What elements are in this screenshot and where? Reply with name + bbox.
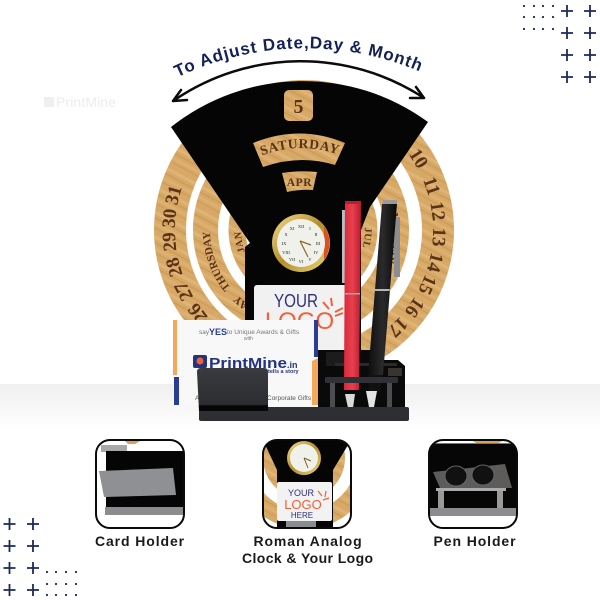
- business card: A: [195, 395, 200, 402]
- calendar wheel: day ring: MONDAY: [392, 212, 398, 264]
- analog clock: XI: [290, 226, 295, 231]
- label: roman analog clock and your logo: Clock & Your Logo: [242, 550, 374, 566]
- pen holder back plate: [318, 350, 405, 410]
- date tile: 5: [294, 96, 304, 118]
- analog clock: II: [314, 232, 318, 237]
- calendar wheel: month ring: JUL: [362, 228, 372, 248]
- calendar wheel: day ring: FRIDAY: [212, 150, 248, 191]
- red pen: [342, 201, 361, 408]
- decoration: bottom left plus and dot grid: [4, 518, 77, 596]
- analog clock: IV: [314, 250, 319, 255]
- black fan panel with stand: [171, 81, 428, 352]
- calendar wheel: day ring: [193, 174, 409, 320]
- business card: PrintMine: [209, 355, 287, 372]
- watermark logo: PrintMine: [56, 94, 116, 110]
- card holder front: [197, 368, 268, 411]
- day tile: SATURDAY: [260, 139, 340, 155]
- business card: [173, 320, 318, 406]
- label: card holder: Card Holder: [95, 533, 185, 549]
- calendar wheel: date ring: 29: [159, 231, 181, 252]
- decoration: top right plus and dot grid: [523, 5, 596, 83]
- thumbnail: clock and logo: LOGO: [284, 497, 322, 512]
- analog clock: X: [284, 232, 288, 237]
- your logo plate: LOGO: [265, 308, 334, 335]
- calendar wheel: date ring: 11: [418, 174, 444, 198]
- calendar wheel: date ring: 16: [400, 293, 428, 321]
- pen holder details: [326, 352, 402, 376]
- month tile: [282, 171, 317, 192]
- label: roman analog clock and your logo: [242, 533, 374, 566]
- calendar wheel: date ring: 15: [413, 272, 440, 298]
- business card: say: [199, 329, 210, 336]
- your logo plate: YOUR: [274, 291, 318, 311]
- analog clock: [272, 214, 330, 272]
- pen holder shelf and legs: [325, 377, 398, 409]
- your logo plate: [254, 285, 354, 350]
- calendar wheel: date ring: 27: [170, 277, 198, 304]
- business card: Corporate Gifts: [267, 395, 312, 402]
- calendar wheel: date ring: [159, 96, 449, 364]
- business card: YES: [209, 327, 227, 337]
- calendar wheel: day ring: AY: [232, 296, 245, 309]
- calendar wheel: date ring: 30: [159, 208, 181, 229]
- calendar wheel: date ring: 17: [383, 313, 412, 341]
- analog clock: VI: [299, 259, 304, 264]
- calendar wheel: date ring: 31: [161, 183, 187, 207]
- calendar wheel: date ring: 14: [422, 251, 447, 275]
- day tile: [253, 134, 345, 167]
- date tile: [284, 90, 313, 121]
- thumbnail: card holder: [96, 440, 184, 528]
- analog clock: IX: [282, 241, 287, 246]
- calendar wheel: date ring: 10: [404, 145, 432, 172]
- calendar wheel: month ring: JAN: [234, 232, 245, 252]
- floor shadow: [0, 384, 600, 430]
- thumbnail: clock and logo: HERE: [291, 511, 313, 520]
- calendar wheel: month ring: [228, 204, 378, 276]
- calendar wheel: day ring: SUNDAY: [323, 133, 369, 166]
- calendar wheel: date ring: 28: [162, 255, 187, 279]
- heading: curved title: To Adjust Date,Day & Month: [172, 36, 422, 76]
- base plate: [199, 407, 409, 421]
- thumbnail: pen holder: [429, 440, 517, 528]
- analog clock: VIII: [282, 250, 290, 255]
- black pen: [366, 200, 400, 407]
- analog clock: VII: [289, 257, 296, 262]
- business card: with: [244, 336, 253, 342]
- business card: to Unique Awards & Gifts: [227, 329, 300, 336]
- label: pen holder: Pen Holder: [434, 533, 516, 549]
- arrow: curved double-headed: [173, 61, 424, 101]
- month tile: APR: [287, 177, 312, 189]
- analog clock: V: [308, 257, 312, 262]
- business card: .in: [287, 360, 298, 370]
- analog clock: XII: [298, 224, 305, 229]
- calendar wheel: date ring: 13: [427, 227, 449, 247]
- calendar wheel: date ring: 26: [184, 299, 212, 327]
- analog clock: III: [316, 241, 321, 246]
- business card: tells a story: [268, 369, 300, 375]
- analog clock: I: [309, 226, 311, 231]
- calendar wheel: day ring: TUESDAY: [306, 301, 360, 330]
- thumbnail: clock and logo: YOUR: [288, 488, 314, 498]
- calendar wheel: date ring: 12: [425, 200, 449, 222]
- calendar wheel: day ring: THURSDAY: [202, 232, 230, 292]
- label: roman analog clock and your logo: Roman Analog: [253, 533, 363, 549]
- thumbnail: clock and logo: [262, 439, 352, 529]
